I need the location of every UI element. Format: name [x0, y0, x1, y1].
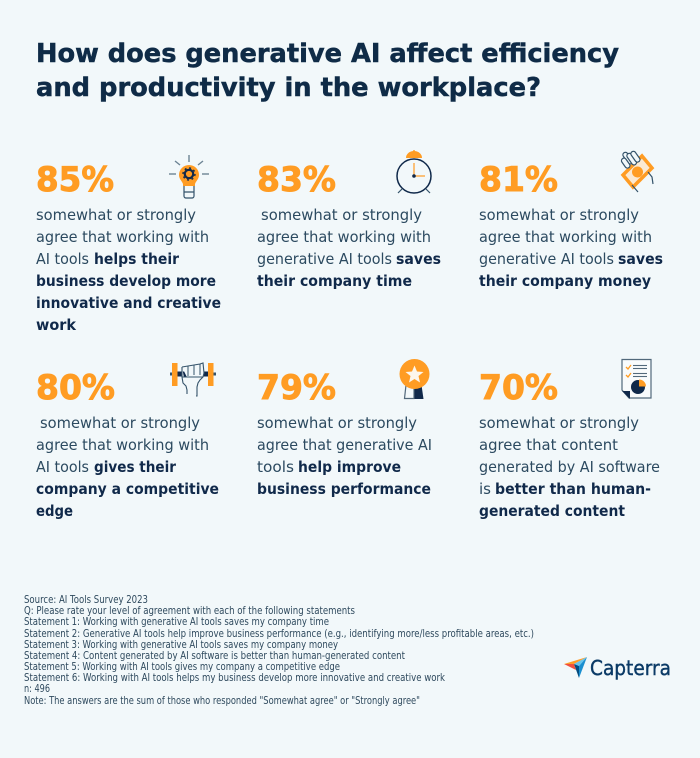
description	[257, 206, 441, 290]
description: agree that working with	[479, 228, 652, 246]
description: agree that generative AI	[257, 436, 432, 454]
description: work	[36, 316, 77, 334]
description: generative AI tools	[479, 250, 614, 268]
description: somewhat or strongly	[261, 206, 422, 224]
description: company a competitive	[36, 480, 219, 498]
description: agree that working with	[257, 228, 431, 246]
description: agree that working with	[36, 436, 209, 454]
source notes: Statement 6: Working with AI tools helps my business develop more innovative and creative work	[24, 673, 445, 684]
description: better than human-	[495, 480, 651, 498]
description: helps their	[94, 250, 179, 268]
stat number 83%: 83%	[257, 160, 336, 200]
description: their company time	[257, 272, 412, 290]
description: generative AI tools	[257, 250, 392, 268]
description: saves	[618, 250, 663, 268]
source notes: Statement 4: Content generated by AI software is better than human-generated content	[24, 651, 405, 662]
description: somewhat or strongly	[479, 206, 639, 224]
source notes: Source: AI Tools Survey 2023	[24, 595, 148, 606]
title: How does generative AI affect efficiency	[36, 39, 619, 69]
description: innovative and creative	[36, 294, 221, 312]
description	[257, 414, 432, 498]
description: business performance	[257, 480, 431, 498]
stat number 79%: 79%	[257, 368, 336, 408]
description: help improve	[298, 458, 401, 476]
description: is	[479, 480, 491, 498]
stat number 70%: 70%	[479, 368, 558, 408]
description: AI tools	[36, 458, 89, 476]
panel: 79% stat	[257, 359, 432, 498]
source notes: Note: The answers are the sum of those who responded "Somewhat agree" or "Strongly agree"	[24, 696, 420, 707]
icon: fist lifting dumbbell	[170, 363, 216, 396]
description: agree that content	[479, 436, 618, 454]
icon: light bulb with gear	[169, 155, 209, 198]
description: tools	[257, 458, 294, 476]
description: somewhat or strongly	[257, 414, 417, 432]
source notes: Statement 1: Working with generative AI tools saves my company time	[24, 617, 329, 628]
description: generated content	[479, 502, 626, 520]
icon: award medal with star	[400, 359, 430, 399]
description: saves	[396, 250, 441, 268]
description	[36, 414, 219, 520]
panel: 70% stat	[479, 360, 660, 520]
stat number 81%: 81%	[479, 160, 558, 200]
wordmark: Capterra	[590, 656, 671, 680]
description: somewhat or strongly	[40, 414, 200, 432]
description	[479, 414, 660, 520]
stat number 85%: 85%	[36, 160, 114, 200]
source notes: Statement 3: Working with generative AI tools saves my company money	[24, 640, 338, 651]
description: somewhat or strongly	[36, 206, 196, 224]
panel: 80% stat	[36, 363, 219, 520]
panel: 83% stat	[257, 150, 441, 290]
description: somewhat or strongly	[479, 414, 639, 432]
icon: report document with pie chart	[622, 360, 651, 399]
title	[36, 39, 619, 103]
panel: 85% stat	[36, 155, 221, 334]
description: business develop more	[36, 272, 216, 290]
panel: 81% stat	[479, 150, 663, 290]
description	[479, 206, 663, 290]
source notes: Statement 5: Working with AI tools gives my company a competitive edge	[24, 662, 340, 673]
description: gives their	[94, 458, 176, 476]
source notes: Q: Please rate your level of agreement with each of the following statements	[24, 606, 355, 617]
source notes: n: 496	[24, 684, 50, 695]
icon: alarm clock	[397, 150, 431, 193]
source notes: Statement 2: Generative AI tools help improve business performance (e.g., identifying more/less profitable areas, etc.)	[24, 629, 534, 640]
description: AI tools	[36, 250, 89, 268]
icon: Capterra arrow	[564, 657, 587, 678]
description: generated by AI software	[479, 458, 660, 476]
source notes	[24, 595, 534, 707]
icon: hand holding money	[620, 150, 653, 192]
description: edge	[36, 502, 73, 520]
description	[36, 206, 221, 334]
description: their company money	[479, 272, 651, 290]
title: and productivity in the workplace?	[36, 73, 541, 103]
description: agree that working with	[36, 228, 209, 246]
stat number 80%: 80%	[36, 368, 115, 408]
logo: Capterra	[564, 656, 671, 680]
